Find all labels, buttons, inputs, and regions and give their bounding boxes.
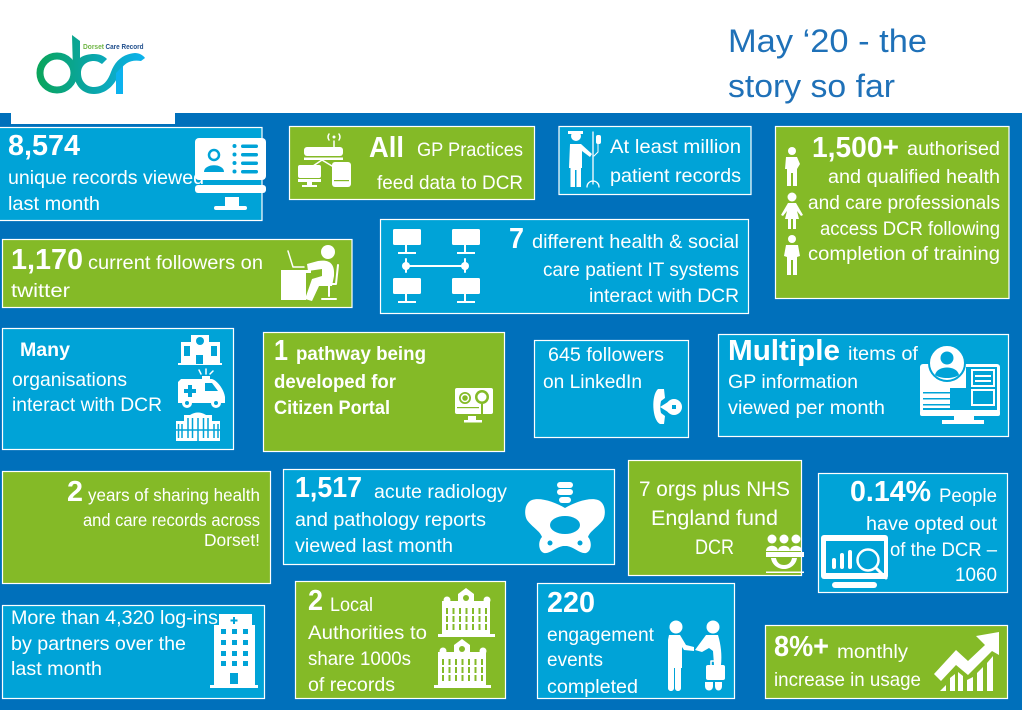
stat text: interact with DCR bbox=[12, 394, 162, 416]
stat text bbox=[369, 132, 523, 194]
icon: female professional bbox=[781, 192, 803, 229]
panel: Many organisations bbox=[2, 328, 234, 450]
stat text: access DCR following bbox=[820, 218, 1000, 240]
stat text: current followers on bbox=[88, 252, 263, 274]
stat text: 0.14% bbox=[850, 476, 931, 508]
icon: pelvis bbox=[525, 482, 605, 553]
stat text: DCR bbox=[695, 536, 734, 559]
stat text: 1060 bbox=[955, 564, 997, 586]
stat text bbox=[850, 476, 998, 586]
stat text: 1,170 bbox=[11, 244, 83, 276]
stat text: share 1000s bbox=[308, 648, 411, 670]
stat text: feed data to DCR bbox=[377, 172, 523, 194]
stat text bbox=[295, 472, 507, 557]
stat text: of records bbox=[308, 674, 395, 696]
panel: 1,500+ professionals bbox=[776, 126, 1009, 298]
panel: 220 engagement events bbox=[538, 584, 734, 698]
stat text: 2 bbox=[308, 585, 323, 617]
panel: All GP practices bbox=[290, 126, 534, 200]
title bbox=[728, 23, 927, 104]
stat text: engagement bbox=[547, 624, 655, 646]
stat text: years of sharing health bbox=[88, 485, 260, 505]
icon: dashboard with user bbox=[920, 345, 1000, 424]
stat text bbox=[728, 335, 919, 419]
panel: 2 years of sharing bbox=[2, 472, 270, 584]
stat text bbox=[308, 585, 427, 696]
stat text: 645 followers bbox=[548, 344, 664, 366]
stat text: events bbox=[547, 649, 603, 671]
stat text: People bbox=[939, 485, 997, 507]
stat text: At least million bbox=[610, 136, 741, 158]
icon: rising chart arrow bbox=[934, 632, 999, 691]
panel: 1,517 radiology reports bbox=[284, 470, 614, 564]
stat text: 8,574 bbox=[8, 130, 80, 162]
stat text: and care professionals bbox=[808, 192, 1000, 214]
stat text bbox=[808, 132, 1000, 265]
stat text: acute radiology bbox=[374, 481, 507, 503]
panel: At least million patient records bbox=[559, 126, 751, 194]
stat text: All bbox=[369, 132, 404, 164]
stat text bbox=[774, 631, 921, 691]
stat text: 7 bbox=[509, 223, 524, 255]
stat text bbox=[11, 607, 218, 680]
panel: 1 pathway bbox=[264, 332, 504, 452]
icon: hospital bbox=[178, 335, 222, 365]
stat text: items of bbox=[848, 343, 919, 365]
icon: town hall top bbox=[438, 588, 495, 637]
stat text: monthly bbox=[837, 641, 908, 663]
stat text: 220 bbox=[547, 587, 595, 619]
logo: Dorset Care Record bbox=[40, 35, 145, 94]
panel: 1,170 twitter followers bbox=[2, 240, 352, 308]
panel: Multiple items of GP information bbox=[718, 334, 1008, 436]
icon: clinician with clipboard bbox=[785, 147, 800, 186]
stat text: authorised bbox=[907, 138, 1000, 160]
stat text: increase in usage bbox=[774, 669, 921, 691]
stat text: 7 orgs plus NHS bbox=[639, 478, 790, 501]
stat text: care patient IT systems bbox=[543, 259, 739, 281]
stat text: Authorities to bbox=[308, 622, 427, 644]
stat text: Dorset! bbox=[204, 530, 260, 550]
stat text: completed bbox=[547, 676, 638, 698]
stat text bbox=[274, 335, 426, 419]
panel: 4,320 log-ins bbox=[2, 606, 264, 698]
icon: monitor with profile bbox=[195, 138, 266, 210]
icon: connected network bbox=[393, 229, 480, 303]
logo: Dorset Care Record: Dorset bbox=[83, 44, 105, 51]
stat text: of the DCR – bbox=[890, 539, 997, 561]
panel: 2 Local Authorities bbox=[296, 582, 506, 698]
stat text: unique records viewed bbox=[8, 167, 204, 189]
stat text bbox=[8, 130, 204, 215]
stat text bbox=[11, 244, 263, 302]
stat text: Local bbox=[330, 594, 373, 616]
icon: chart with magnifier bbox=[821, 535, 888, 588]
stat text bbox=[639, 478, 790, 559]
stat text: and qualified health bbox=[828, 166, 1000, 188]
white tab under logo bbox=[11, 113, 175, 124]
icon: router and devices bbox=[298, 134, 351, 187]
icon: person at desk bbox=[281, 245, 338, 301]
panel: 645 LinkedIn followers bbox=[534, 340, 688, 438]
stat text: on LinkedIn bbox=[543, 371, 642, 393]
panel: 8,574 unique records bbox=[0, 128, 266, 220]
logo: Dorset Care Record: Care Record bbox=[106, 44, 144, 51]
stat text: viewed last month bbox=[295, 535, 453, 557]
panel: 8%+ monthly increase bbox=[766, 626, 1008, 698]
stat text: have opted out bbox=[866, 513, 998, 535]
panel: 7 orgs plus NHS England bbox=[628, 460, 804, 576]
stat text: last month bbox=[11, 658, 102, 680]
icon: large building bbox=[176, 412, 220, 441]
stat text: GP Practices bbox=[417, 139, 523, 161]
icon: handshake with briefcase bbox=[668, 620, 725, 691]
stat text: developed for bbox=[274, 371, 396, 393]
title: story so far bbox=[728, 68, 895, 104]
stat text: 1 bbox=[274, 335, 288, 367]
stat text: More than 4,320 log-ins bbox=[11, 607, 218, 629]
icon: patient with IV stand bbox=[568, 131, 601, 187]
stat text: pathway being bbox=[296, 343, 426, 365]
stat text: 1,500+ bbox=[812, 132, 899, 164]
stat text bbox=[543, 344, 664, 393]
stat text: Multiple bbox=[728, 335, 840, 367]
stat text bbox=[509, 223, 739, 307]
icon: monitor with magnifier bbox=[455, 388, 493, 422]
stat text: 1,517 bbox=[295, 472, 362, 504]
icon: doctor bbox=[784, 235, 800, 275]
stat text bbox=[67, 476, 260, 550]
stat text bbox=[547, 587, 655, 698]
stat text: Many bbox=[20, 339, 70, 361]
stat text: 8%+ bbox=[774, 631, 829, 663]
stat text: organisations bbox=[12, 369, 127, 391]
stat text: and care records across bbox=[83, 510, 260, 530]
stat text: GP information bbox=[728, 371, 858, 393]
stat text: and pathology reports bbox=[295, 509, 486, 531]
icon: ambulance bbox=[178, 369, 225, 408]
icon: town hall bottom bbox=[434, 639, 491, 688]
stat text: different health & social bbox=[532, 231, 739, 253]
stat text: 2 bbox=[67, 476, 83, 508]
stat text: patient records bbox=[610, 165, 741, 187]
stat text: Citizen Portal bbox=[274, 397, 390, 419]
stat text: interact with DCR bbox=[589, 285, 739, 307]
stat text: completion of training bbox=[808, 243, 1000, 265]
icon: team and gear bbox=[766, 534, 804, 573]
title: May ‘20 - the bbox=[728, 23, 927, 59]
stat text: last month bbox=[8, 193, 100, 215]
icon: hospital tower bbox=[210, 614, 258, 688]
panel: 7 different systems bbox=[380, 220, 748, 314]
stat text bbox=[610, 136, 741, 187]
stat text: England fund bbox=[651, 507, 778, 530]
panel: 0.14% opted out bbox=[818, 474, 1008, 592]
stat text: viewed per month bbox=[728, 397, 885, 419]
stat text: twitter bbox=[11, 280, 71, 302]
stat text bbox=[12, 339, 162, 416]
stat text: by partners over the bbox=[11, 633, 186, 655]
icon: phone bbox=[653, 389, 682, 424]
